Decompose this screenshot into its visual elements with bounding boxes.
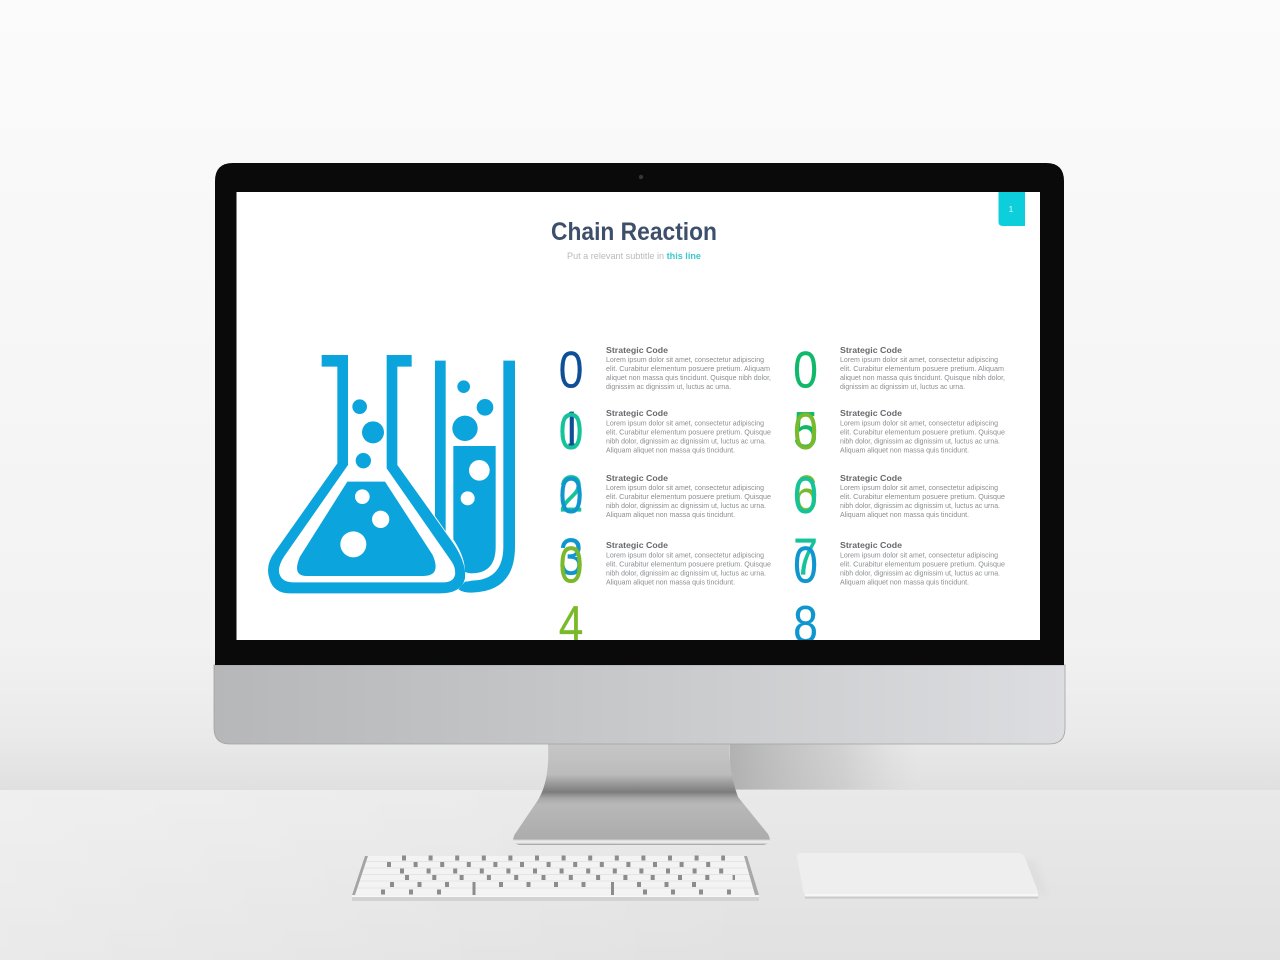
numbers: right column: 0: [793, 467, 818, 525]
text block: item 03: nibh dolor, dignissim ac dignissim ut, luctus ac urna.: [606, 501, 766, 510]
text block: item 04: nibh dolor, dignissim ac dignissim ut, luctus ac urna.: [606, 568, 766, 578]
text block: item 08: Strategic Code: [840, 540, 902, 550]
text block: item 07: nibh dolor, dignissim ac dignissim ut, luctus ac urna.: [840, 501, 1000, 510]
numbers: left column: 1: [559, 401, 583, 459]
text block: item 03: Lorem ipsum dolor sit amet, consectetur adipiscing: [606, 483, 764, 492]
flask: [268, 355, 465, 593]
numbers: right column: 0: [793, 536, 818, 594]
text block: item 04: Lorem ipsum dolor sit amet, consectetur adipiscing: [606, 550, 764, 560]
text block: item 06: Strategic Code: [840, 408, 902, 418]
text block: item 02: Aliquam aliquet non massa quis tincidunt.: [606, 446, 735, 454]
monitor: [214, 163, 1065, 845]
text block: item 04: elit. Curabitur elementum posuere pretium. Quisque: [606, 560, 771, 568]
monitor bezel: [215, 163, 1064, 665]
text block: item 05: Strategic Code: [840, 345, 902, 355]
text block: item 01: dignissim ac dignissim ut, luctus ac urna.: [606, 382, 731, 391]
text block: item 03: Aliquam aliquet non massa quis tincidunt.: [606, 510, 735, 519]
numbers: right column: 0: [793, 341, 818, 399]
page number tab: 1: [1009, 205, 1014, 214]
text block: item 06: [840, 408, 1005, 454]
numbers: left column: 2: [559, 465, 583, 523]
trackpad: [797, 853, 1048, 898]
text block: item 02: [606, 408, 771, 454]
text block: item 08: elit. Curabitur elementum posuere pretium. Quisque: [840, 560, 1005, 568]
text block: item 03: elit. Curabitur elementum posuere pretium. Quisque: [606, 492, 771, 501]
text block: item 02: Strategic Code: [606, 408, 668, 418]
numbers: left column: 0: [559, 536, 583, 594]
text block: item 06: nibh dolor, dignissim ac dignissim ut, luctus ac urna.: [840, 436, 1000, 446]
monitor chin: [214, 665, 1065, 744]
text block: item 08: Lorem ipsum dolor sit amet, consectetur adipiscing: [840, 550, 998, 560]
numbers: right column: 0: [793, 403, 818, 461]
text block: item 05: dignissim ac dignissim ut, luctus ac urna.: [840, 382, 965, 391]
text block: item 03: [606, 473, 771, 519]
text block: item 01: aliquet non massa quis tincidunt. Quisque nibh dolor,: [606, 373, 771, 382]
screen: [236, 192, 1040, 640]
text block: item 05: aliquet non massa quis tincidunt. Quisque nibh dolor,: [840, 373, 1005, 382]
text block: item 01: Strategic Code: [606, 345, 668, 355]
text block: item 07: elit. Curabitur elementum posuere pretium. Quisque: [840, 492, 1005, 501]
text block: item 04: [606, 540, 771, 586]
test tube: [435, 361, 515, 593]
numbers: right column: [794, 351, 816, 640]
numbers: right column: 7: [793, 528, 818, 586]
text block: item 05: elit. Curabitur elementum posuere pretium. Aliquam: [840, 364, 1004, 373]
text block: item 06: Lorem ipsum dolor sit amet, consectetur adipiscing: [840, 418, 998, 428]
text block: item 06: Aliquam aliquet non massa quis tincidunt.: [840, 446, 969, 454]
text block: item 08: nibh dolor, dignissim ac dignissim ut, luctus ac urna.: [840, 568, 1000, 578]
monitor stand: [513, 744, 770, 845]
webcam: [639, 175, 643, 179]
numbers: left column: [560, 351, 582, 640]
numbers: right column: 5: [793, 402, 818, 460]
text block: item 04: Strategic Code: [606, 540, 668, 550]
text block: item 06: elit. Curabitur elementum posuere pretium. Quisque: [840, 428, 1005, 436]
text block: item 08: Aliquam aliquet non massa quis tincidunt.: [840, 578, 969, 586]
text block: item 02: Lorem ipsum dolor sit amet, consectetur adipiscing: [606, 418, 764, 428]
numbers: left column: 0: [559, 341, 583, 399]
keyboard: [352, 856, 759, 901]
numbers: left column: 4: [559, 596, 583, 654]
numbers: left column: 3: [559, 528, 583, 586]
text block: item 05: Lorem ipsum dolor sit amet, consectetur adipiscing: [840, 355, 998, 364]
numbers: left column: 0: [559, 403, 583, 461]
text block: item 07: Lorem ipsum dolor sit amet, consectetur adipiscing: [840, 483, 998, 492]
text block: item 05: [840, 345, 1005, 391]
subtitle: Put a relevant subtitle in this line: [567, 251, 701, 262]
numbers: right column: 6: [793, 465, 818, 523]
text block: item 02: nibh dolor, dignissim ac dignissim ut, luctus ac urna.: [606, 436, 766, 446]
numbers: left column: 0: [559, 467, 583, 525]
text block: item 07: Strategic Code: [840, 473, 902, 483]
text block: item 01: Lorem ipsum dolor sit amet, consectetur adipiscing: [606, 355, 764, 364]
text block: item 04: Aliquam aliquet non massa quis tincidunt.: [606, 578, 735, 586]
text block: item 07: [840, 473, 1005, 519]
text block: item 07: Aliquam aliquet non massa quis tincidunt.: [840, 510, 969, 519]
text block: item 03: Strategic Code: [606, 473, 668, 483]
numbers: right column: 8: [793, 596, 818, 654]
icon: flask and test tube: [268, 355, 515, 593]
text block: item 01: [606, 345, 771, 391]
page number tab: [998, 192, 1025, 226]
text block: item 02: elit. Curabitur elementum posuere pretium. Quisque: [606, 428, 771, 436]
text block: item 08: [840, 540, 1005, 586]
title: Chain Reaction: [551, 218, 717, 246]
text block: item 01: elit. Curabitur elementum posuere pretium. Aliquam: [606, 364, 770, 373]
